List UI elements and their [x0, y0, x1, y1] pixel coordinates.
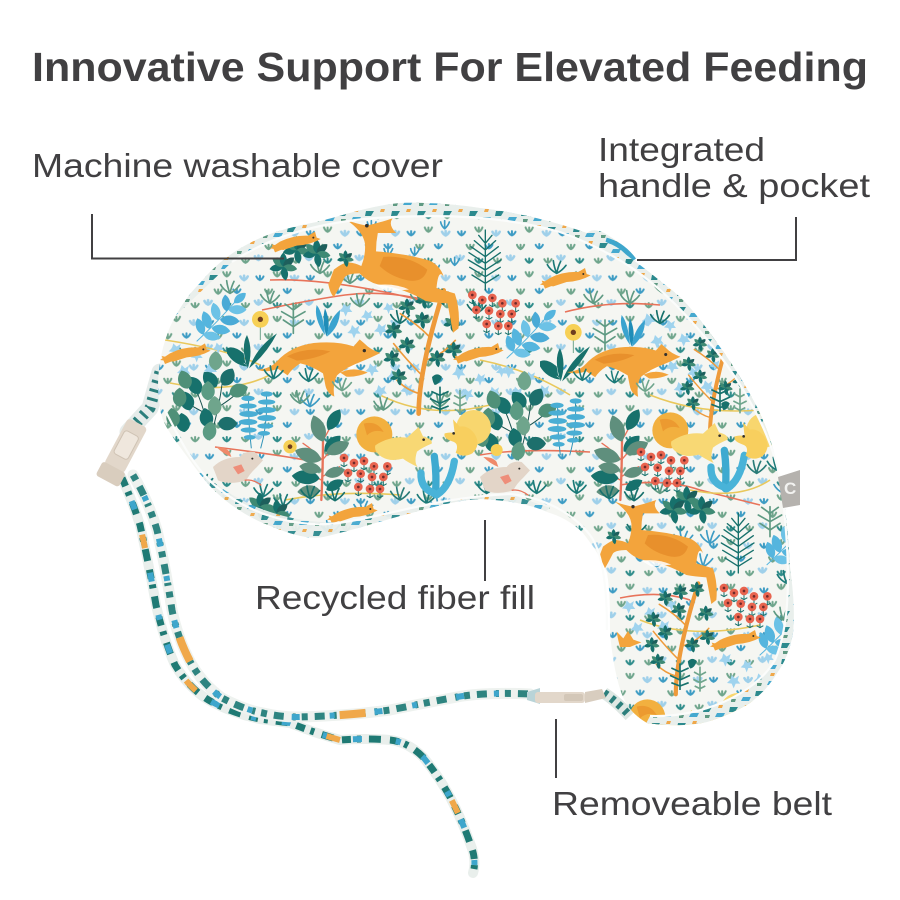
- strap lower loose strand: [122, 478, 474, 873]
- callout: integrated handle and pocket: handle & pocket: [598, 167, 870, 204]
- callout: removeable belt: Removeable belt: [552, 785, 832, 822]
- bottom seam band: [200, 472, 550, 538]
- callout: recycled fiber fill: Recycled fiber fill: [255, 579, 535, 616]
- strap belt strand: [133, 475, 530, 717]
- callout: machine washable cover: Machine washable cover: [32, 147, 443, 184]
- nursing pillow: [150, 195, 818, 750]
- hill lines: [165, 280, 770, 631]
- red flower clusters: [340, 291, 772, 628]
- trees: [269, 236, 747, 694]
- ferns: [468, 230, 754, 573]
- title: Innovative Support For Elevated Feeding: [32, 44, 868, 90]
- pillow tag: C: [784, 479, 796, 498]
- fabric base pattern: [150, 195, 800, 730]
- blue leaf branches: [193, 290, 818, 656]
- side buckle: [95, 417, 149, 487]
- squirrels: [356, 410, 781, 750]
- small tufts: [194, 221, 796, 620]
- lower right edge band: [646, 509, 794, 726]
- red stem plants: [291, 406, 651, 501]
- piping: [165, 216, 788, 716]
- callout: machine washable cover: [32, 147, 443, 258]
- deer: [328, 218, 717, 604]
- handle and pocket bump: [585, 230, 636, 261]
- light blue flowers: [169, 303, 810, 688]
- belt buckle: [527, 688, 606, 704]
- callout: integrated handle and pocket: [598, 131, 870, 260]
- strap upper segment: [128, 372, 160, 432]
- strap end by pillow: [604, 693, 630, 716]
- pillow fabric print: [158, 202, 794, 726]
- small foxes and birds: [160, 232, 761, 651]
- belt strap: [122, 372, 630, 873]
- top seam band: [176, 202, 772, 446]
- foxes: [257, 339, 680, 397]
- round-leaf plants: [165, 351, 716, 528]
- blue tufts: [282, 303, 818, 537]
- callout: integrated handle and pocket: Integrated: [598, 131, 765, 168]
- rabbits: [213, 447, 530, 495]
- yellow flowers: [227, 311, 799, 693]
- blue sprigs: [239, 391, 585, 455]
- blue plant stalks: [421, 450, 744, 495]
- motifs layer drawn at 3x: [160, 218, 818, 750]
- pillow tag: [778, 470, 800, 508]
